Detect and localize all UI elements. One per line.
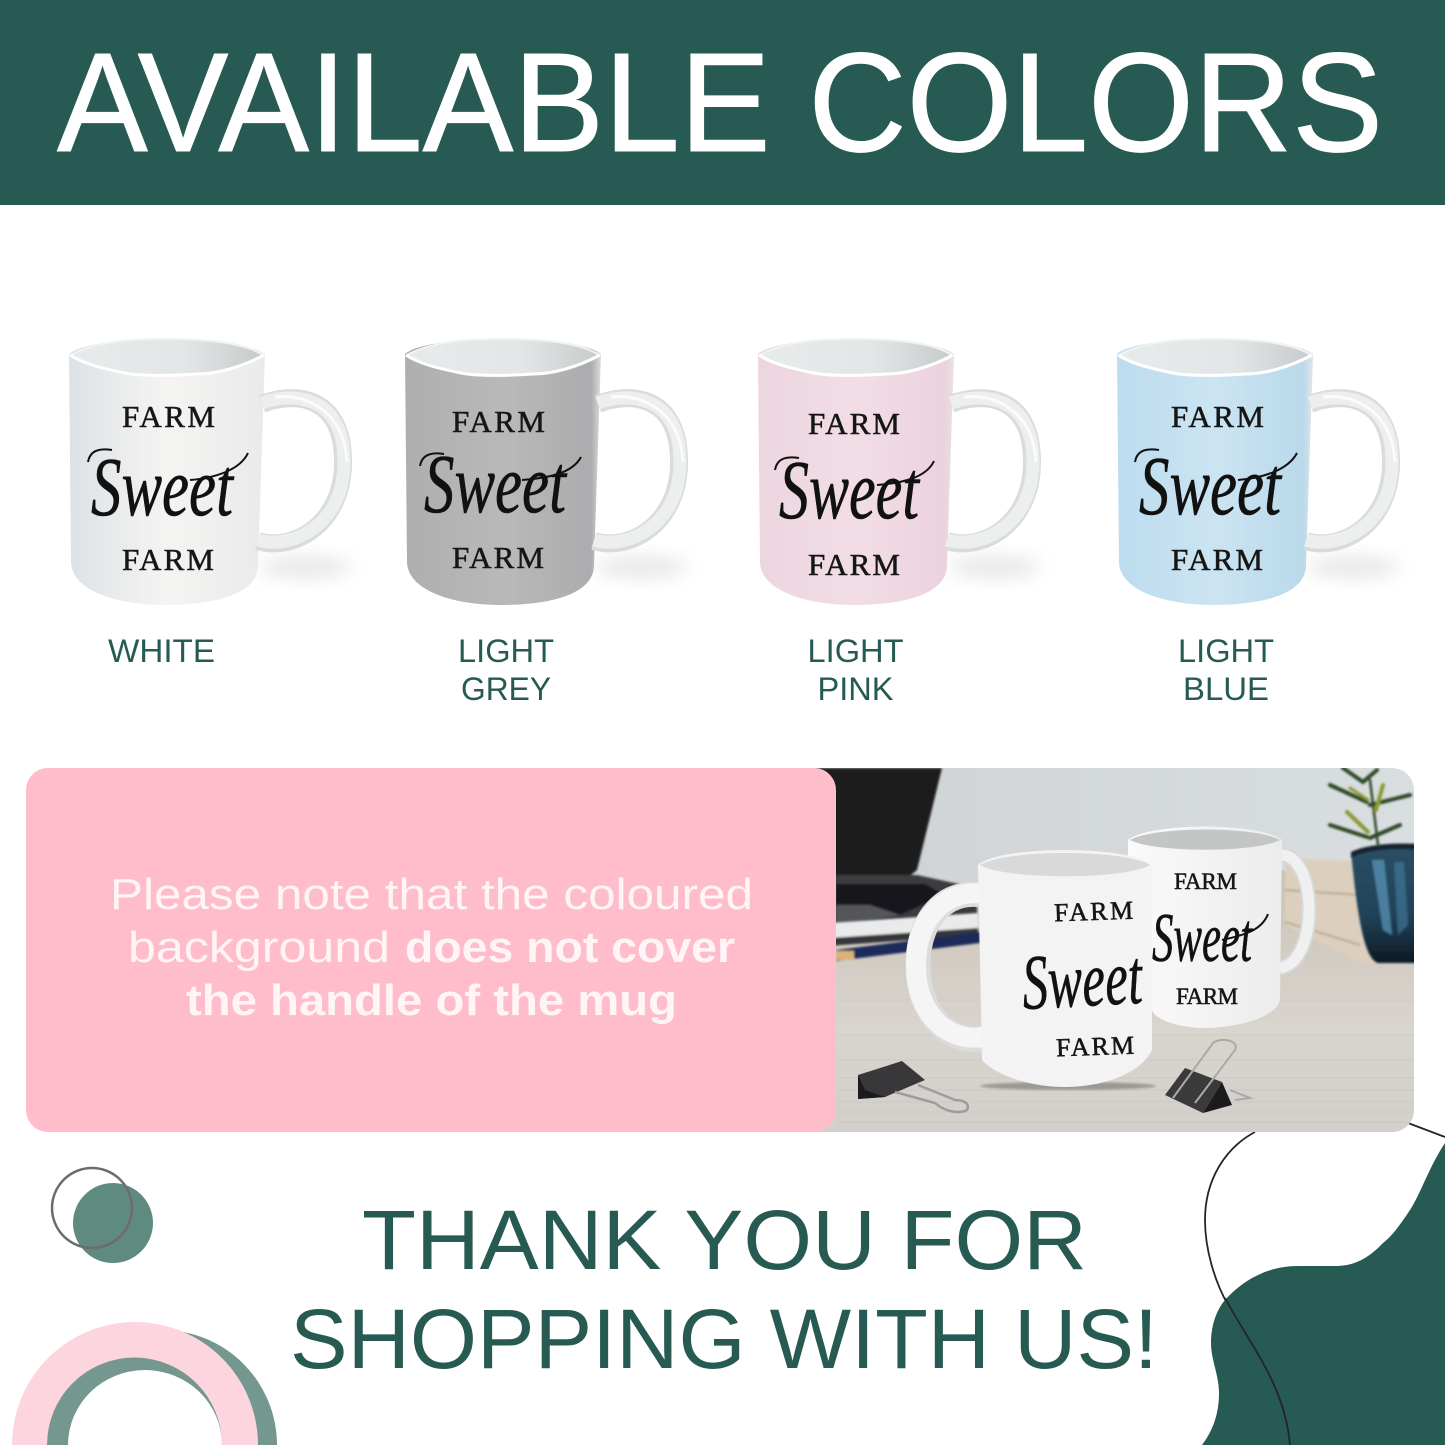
table grain: [836, 1000, 1414, 1122]
label: light pink: [808, 633, 904, 707]
front mug: Sweet: [1020, 933, 1146, 1026]
mug: light blue: FARM: [1171, 399, 1264, 434]
mug: light grey: FARM: [452, 404, 545, 439]
front mug: [916, 850, 1156, 1090]
back mug: Sweet: [1152, 900, 1253, 977]
mug: light grey: Sweet: [424, 438, 568, 531]
mug: white: FARM: [122, 542, 214, 577]
mug: light blue: FARM: [1171, 542, 1263, 577]
wooden box: [1284, 858, 1373, 964]
mug: light grey: [405, 339, 687, 605]
label: light blue: LIGHT: [1178, 633, 1274, 669]
decorative circles: [52, 1168, 153, 1263]
back mug: [1128, 826, 1309, 1028]
blob curve line: [1225, 1298, 1290, 1445]
note text: does not cover: [405, 923, 735, 972]
plant: [1330, 768, 1410, 845]
photo: two mugs on a desk: [800, 768, 1420, 1132]
mug: white: [69, 339, 351, 605]
mug: white: Sweet: [91, 441, 235, 534]
note text: the handle of the mug: [186, 976, 677, 1025]
mug: light pink: [758, 339, 1040, 605]
label: white: WHITE: [108, 633, 215, 669]
mug: light blue: Sweet: [1139, 440, 1283, 533]
mug: light grey: FARM: [452, 540, 544, 575]
label: light grey: GREY: [461, 671, 551, 707]
table: [800, 870, 1420, 1132]
background curve line: [1205, 1123, 1445, 1445]
label: light pink: LIGHT: [808, 633, 904, 669]
binder clip left: [858, 1061, 968, 1112]
label: light grey: [458, 633, 554, 707]
decorative arches: [12, 1322, 277, 1445]
vase: [1351, 844, 1420, 963]
label: light grey: LIGHT: [458, 633, 554, 669]
mug: light pink: FARM: [808, 547, 900, 582]
closing message: THANK YOU FOR: [362, 1193, 1087, 1287]
back mug: FARM: [1174, 869, 1237, 894]
mug: light pink: FARM: [808, 406, 900, 441]
notebook and pencil: [836, 912, 980, 962]
label: light pink: PINK: [818, 671, 894, 707]
note text: Please note that the coloured: [110, 870, 753, 919]
header banner: [0, 0, 1445, 205]
note panel: [26, 768, 836, 1132]
front mug: FARM: [1054, 896, 1134, 927]
label: light blue: [1178, 633, 1274, 707]
label: light blue: BLUE: [1183, 671, 1269, 707]
back mug: FARM: [1176, 984, 1238, 1009]
mug: white: FARM: [122, 399, 215, 434]
mug: light blue: [1117, 339, 1399, 605]
note text: [110, 870, 753, 1025]
closing message: [290, 1193, 1158, 1386]
laptop: [800, 768, 977, 928]
green blob: [1202, 1143, 1445, 1445]
note text: background: [128, 923, 390, 972]
binder clip right: [1165, 1040, 1250, 1113]
closing message: SHOPPING WITH US!: [290, 1292, 1158, 1386]
title: AVAILABLE COLORS: [57, 23, 1383, 181]
front mug: FARM: [1056, 1031, 1135, 1062]
mug: light pink: Sweet: [779, 444, 921, 537]
